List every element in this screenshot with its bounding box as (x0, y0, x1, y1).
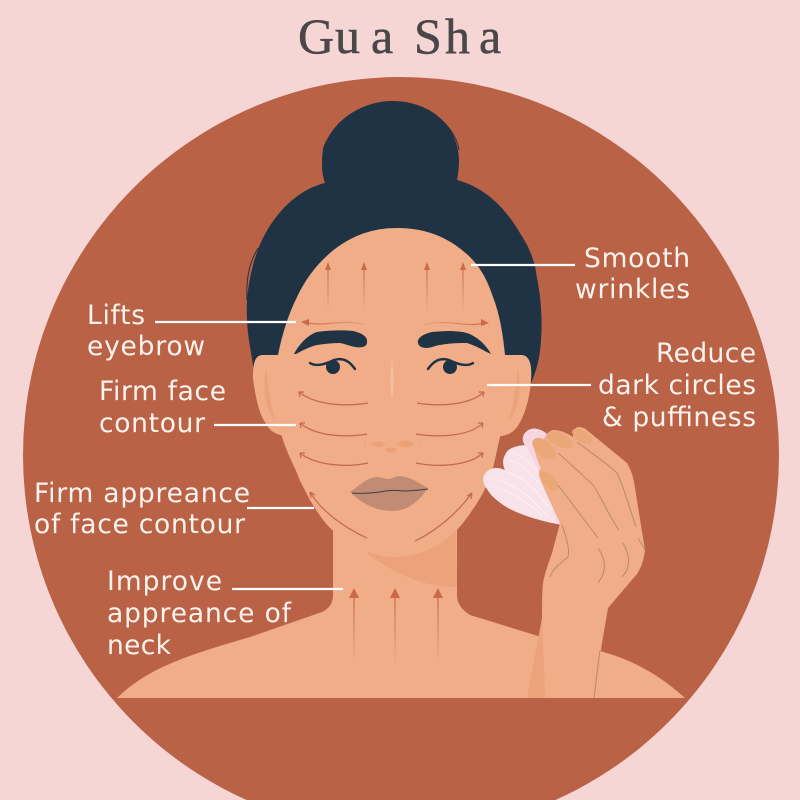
hand (527, 426, 645, 698)
callout: firm face contour: contour (99, 408, 205, 439)
cheek arrows (299, 392, 484, 465)
nose (365, 358, 421, 453)
callout: lifts eyebrow: eyebrow (87, 331, 205, 362)
face (277, 228, 506, 557)
neck shadow (367, 525, 457, 587)
lips (350, 476, 428, 511)
callout: improve appreance of neck (107, 566, 343, 661)
finger nails (528, 426, 594, 494)
callout: improve appreance of neck: Improve (107, 566, 222, 597)
callout: firm face contour: Firm face (99, 376, 226, 407)
jaw arrows (310, 492, 472, 541)
body and neck (117, 520, 685, 698)
gua sha tool (483, 429, 562, 525)
callout: reduce dark circles: dark circles (598, 370, 756, 401)
neck arrows (349, 588, 443, 664)
ears (253, 355, 531, 437)
eyebrows (294, 330, 491, 354)
callout: smooth wrinkles: Smooth (584, 243, 690, 274)
callout: firm appreance of face contour: of face contour (34, 509, 245, 540)
callout: improve appreance of neck: appreance of (107, 598, 292, 629)
callout: firm appreance of face contour (34, 478, 314, 540)
eyes (310, 359, 473, 374)
callout: lifts eyebrow: Lifts (87, 300, 145, 331)
callout: lifts eyebrow (87, 300, 296, 362)
callout: smooth wrinkles (471, 243, 690, 305)
hair (247, 101, 542, 385)
callout: smooth wrinkles: wrinkles (575, 274, 690, 305)
forehead arrows (325, 262, 466, 312)
callout: firm appreance of face contour: Firm appreance (34, 478, 250, 509)
eyebrow arrows (301, 319, 489, 326)
callout: improve appreance of neck: neck (107, 630, 172, 661)
callout: reduce dark circles: Reduce (656, 338, 756, 369)
callout: firm face contour (99, 376, 296, 439)
callout: reduce dark circles (487, 338, 756, 433)
title: Gua Sha (298, 8, 501, 64)
callout: reduce dark circles: & puffiness (602, 402, 756, 433)
